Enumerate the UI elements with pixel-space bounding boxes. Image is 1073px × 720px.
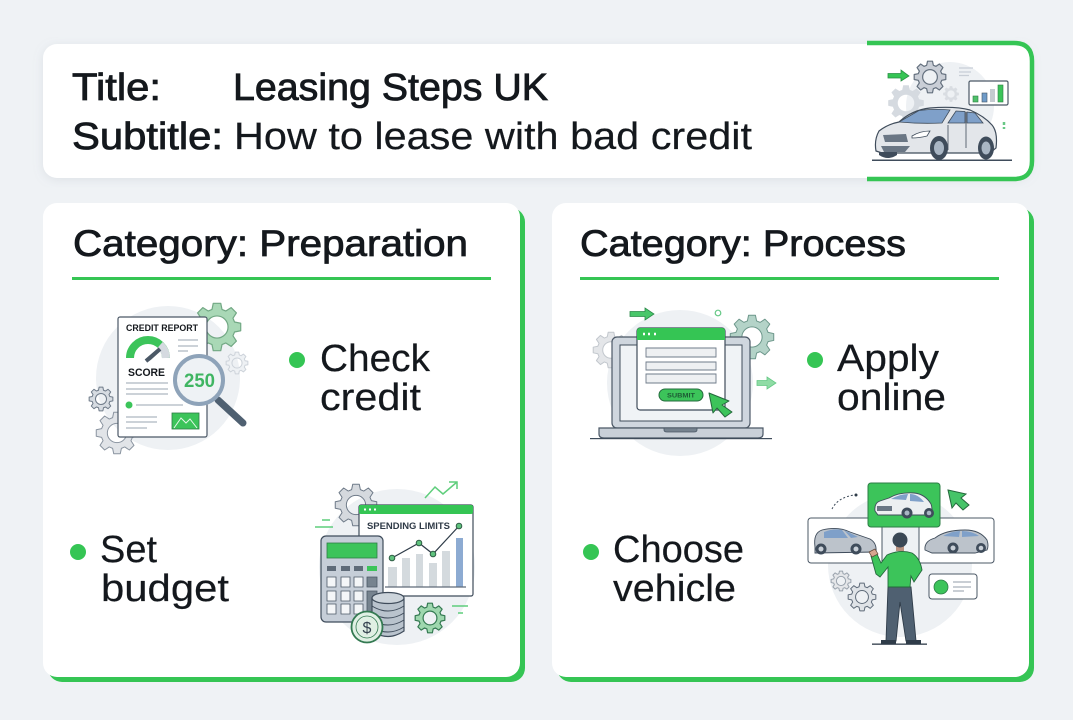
item: choose vehicle <box>583 529 744 610</box>
subtitle: Subtitle: <box>72 116 223 158</box>
heading: preparation: Category: Preparation <box>73 223 468 264</box>
heading rule <box>580 277 999 280</box>
header card <box>43 43 1032 179</box>
subtitle: How to lease with bad credit <box>234 116 752 158</box>
panel: process <box>552 203 1034 682</box>
icon: person choosing a vehicle <box>808 483 994 645</box>
subtitle <box>72 116 752 158</box>
icon: credit report with magnifier: CREDIT REPORT <box>126 323 198 333</box>
item: apply online: online <box>837 377 946 419</box>
icon: calculator, spending chart and coins: $ <box>362 620 372 637</box>
item: set budget: budget <box>101 568 229 610</box>
title: Title: <box>72 67 161 109</box>
icon: car with gears and chart <box>872 61 1012 161</box>
title: Leasing Steps UK <box>233 67 548 109</box>
icon: laptop with online form <box>590 308 776 456</box>
icon: laptop with online form: SUBMIT <box>667 392 695 400</box>
item: set budget: Set <box>100 529 157 571</box>
icon: calculator, spending chart and coins: SPENDING LIMITS <box>367 521 450 532</box>
title <box>72 67 548 109</box>
item: check credit: credit <box>320 377 421 419</box>
item: check credit: Check <box>320 338 431 380</box>
heading rule <box>72 277 491 280</box>
icon: calculator, spending chart and coins <box>315 482 475 645</box>
item: apply online <box>807 338 946 419</box>
item: set budget <box>70 529 229 610</box>
item: choose vehicle: Choose <box>613 529 744 571</box>
item: apply online: Apply <box>837 338 939 380</box>
icon: credit report with magnifier: SCORE <box>128 367 165 379</box>
heading: process: Category: Process <box>580 223 906 264</box>
item: choose vehicle: vehicle <box>613 568 736 610</box>
item: check credit <box>289 338 431 419</box>
header green accent <box>867 43 1032 179</box>
panel: preparation <box>43 203 525 682</box>
icon: credit report with magnifier <box>89 303 248 454</box>
icon: credit report with magnifier: 250 <box>184 371 215 392</box>
